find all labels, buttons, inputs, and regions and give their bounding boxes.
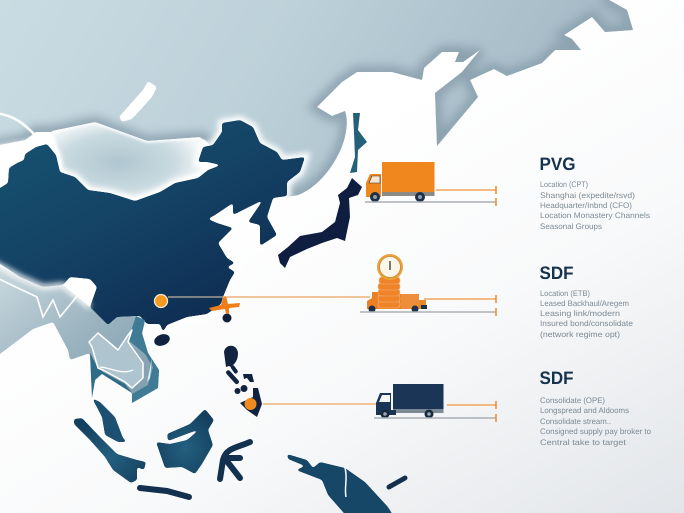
icon: plane <box>209 296 240 314</box>
heading: SDF second: SDF <box>540 368 574 388</box>
region: Southeast Asia <box>0 255 159 403</box>
route lines <box>374 401 496 422</box>
text block: PVG <box>540 154 650 231</box>
details: SDF second: Consigned supply pay broker to <box>540 427 652 436</box>
text block: SDF second <box>540 368 652 447</box>
clock <box>377 254 403 280</box>
island: Borneo <box>156 409 214 474</box>
heading: PVG: PVG <box>540 154 576 174</box>
island: Hainan <box>153 332 171 348</box>
island: Taiwan <box>222 314 232 322</box>
truck: orange <box>366 162 434 202</box>
islands: Philippines <box>224 346 262 417</box>
route lines <box>360 295 496 316</box>
island: Hokkaido <box>350 113 367 173</box>
details: PVG: Shanghai (expedite/rsvd) <box>540 191 635 200</box>
details: PVG <box>540 180 650 231</box>
details: SDF second: Consolidate stream.. <box>540 417 611 426</box>
region: Russia <box>0 0 633 197</box>
route 1: truck and lines <box>365 162 496 206</box>
truck: orange small <box>367 292 427 312</box>
details: PVG: Location Monastery Channels <box>540 211 650 220</box>
origin marker: Philippines <box>244 398 256 410</box>
details: PVG: Seasonal Groups <box>540 222 602 231</box>
details: PVG: Location (CPT) <box>540 180 588 189</box>
details: SDF second: Central take to target <box>540 438 627 447</box>
islands: Japan <box>278 178 362 268</box>
details: SDF first: Insured bond/consolidate <box>540 319 634 328</box>
details: SDF first: Leasing link/modern <box>540 309 620 318</box>
region: China <box>0 120 305 332</box>
details: SDF second <box>540 396 652 447</box>
island: Sulawesi <box>220 442 250 479</box>
details: PVG: Headquarter/Inbnd (CFO) <box>540 201 632 210</box>
details: SDF first: Location (ETB) <box>540 289 590 298</box>
text block: SDF first <box>540 263 634 339</box>
details: SDF first: (network regime opt) <box>540 330 620 339</box>
route 2: clock, coins and truck <box>360 254 496 316</box>
island: Sumatra <box>74 418 146 483</box>
route lines <box>365 186 496 206</box>
island: Java <box>140 488 189 497</box>
heading: SDF first: SDF <box>540 263 574 283</box>
truck: navy <box>376 384 444 418</box>
details: SDF second: Longspread and Aldooms <box>540 406 629 415</box>
region: Mongolia <box>52 123 210 201</box>
connector: China to route 2 <box>168 296 370 298</box>
northern river <box>0 113 34 134</box>
connector: Philippines to route 3 <box>263 403 376 405</box>
origin marker: China <box>154 294 168 308</box>
island: New Guinea <box>287 454 396 513</box>
lake Baikal <box>119 81 157 122</box>
details: SDF second: Consolidate (OPE) <box>540 396 605 405</box>
details: SDF first: Leased Backhaul/Aregem <box>540 299 629 308</box>
coin stack <box>378 277 400 308</box>
route 3: truck and lines <box>374 384 496 422</box>
details: SDF first <box>540 289 634 339</box>
Malay peninsula <box>92 398 127 442</box>
island: small eastern isle <box>389 478 405 487</box>
